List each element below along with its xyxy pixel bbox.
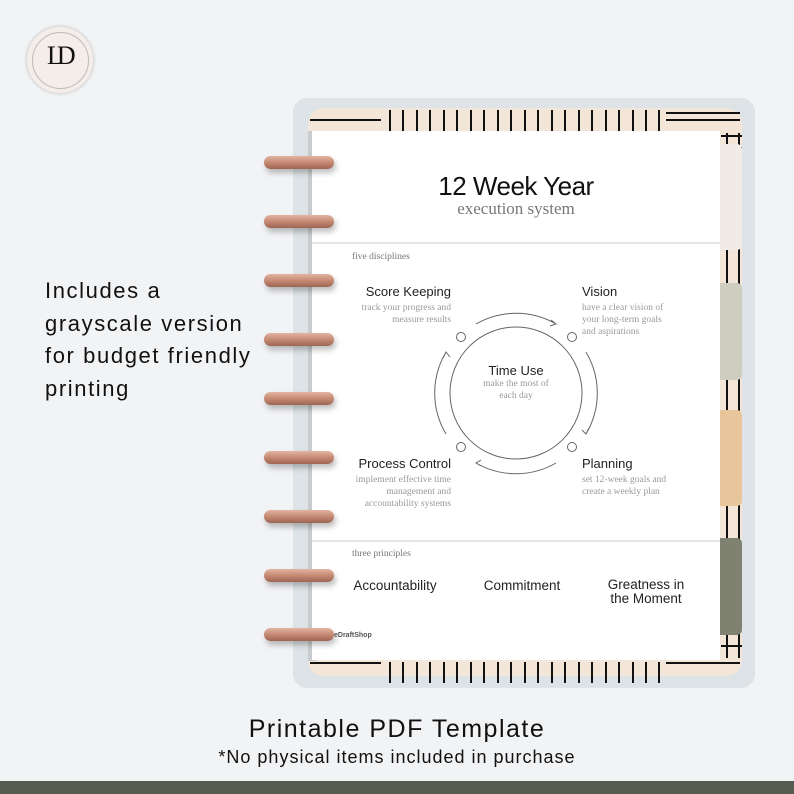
side text (45, 278, 252, 400)
Process Control: Process Control (359, 456, 451, 471)
Score Keeping: measure results (392, 315, 451, 325)
shop tag: eDraftShop (334, 632, 372, 639)
Process Control: accountability systems (365, 499, 451, 509)
caption (218, 715, 576, 767)
caption: *No physical items included in purchase (218, 747, 576, 767)
Vision: Vision (582, 284, 617, 299)
title: 12 Week Year (438, 171, 594, 201)
label three principles: three principles (352, 549, 411, 559)
Process Control: implement effective time (356, 475, 451, 485)
cycle diagram (434, 312, 598, 474)
title: execution system (457, 199, 575, 218)
principles: Commitment (484, 578, 560, 593)
Planning: create a weekly plan (582, 487, 660, 497)
Vision: and aspirations (582, 327, 639, 337)
Process Control: management and (386, 487, 451, 497)
logo (26, 26, 94, 94)
Vision: your long-term goals (582, 315, 662, 325)
logo: LD (47, 41, 70, 70)
center Time Use: make the most of (483, 379, 549, 389)
label five disciplines: five disciplines (352, 252, 410, 262)
principles: Greatness in (608, 577, 684, 592)
Vision (582, 284, 664, 337)
side text: grayscale version (45, 310, 243, 336)
title (438, 171, 594, 218)
Score Keeping: Score Keeping (366, 284, 451, 299)
Planning (582, 456, 666, 497)
principles: Accountability (353, 578, 437, 593)
center Time Use: Time Use (488, 363, 544, 378)
principles (353, 577, 684, 606)
side text: for budget friendly (45, 343, 252, 368)
caption: Printable PDF Template (249, 715, 545, 743)
Planning: set 12-week goals and (582, 475, 666, 485)
center Time Use: each day (499, 391, 533, 401)
Score Keeping (362, 284, 451, 325)
side text: printing (45, 376, 130, 400)
Vision: have a clear vision of (582, 303, 663, 313)
principles: the Moment (610, 591, 682, 606)
side text: Includes a (45, 278, 161, 303)
rings (264, 156, 338, 648)
Score Keeping: track your progress and (362, 303, 451, 313)
center Time Use (483, 363, 549, 401)
bottom bar (0, 781, 794, 794)
Process Control (356, 456, 451, 509)
Planning: Planning (582, 456, 633, 471)
planner (293, 98, 755, 688)
